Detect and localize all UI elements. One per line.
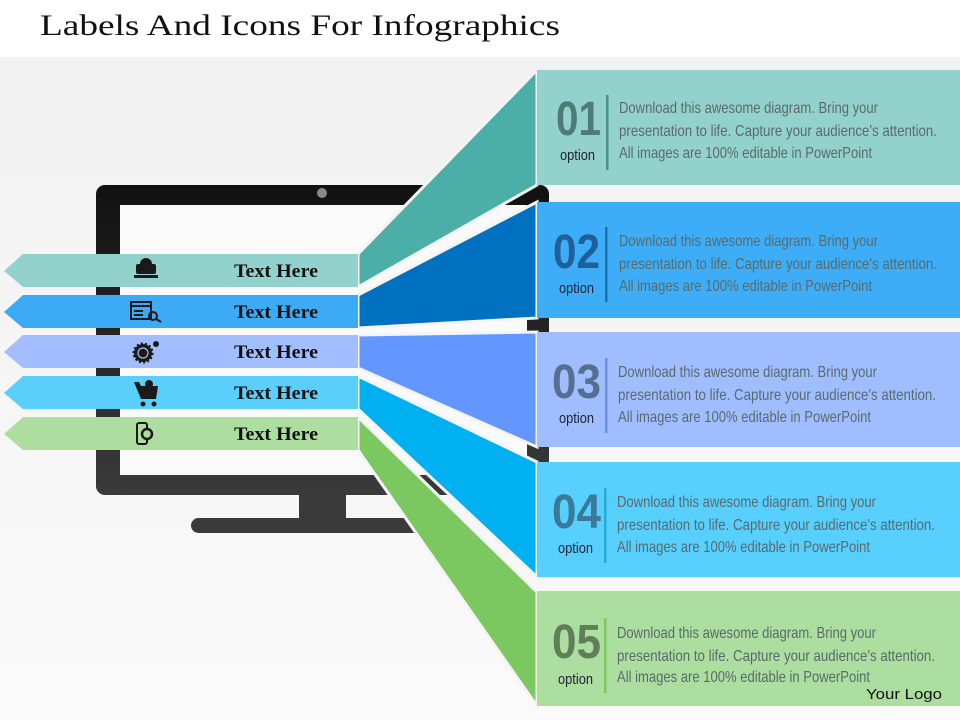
panel 1: Download this awesome diagram. Bring your [619, 100, 879, 117]
row 5: Text Here [234, 424, 318, 445]
icon: cart [134, 380, 158, 406]
connector 2 [358, 202, 537, 328]
panel 5 [537, 591, 960, 706]
panel 4: option [558, 540, 593, 557]
panel 4 [537, 462, 960, 577]
panel 3: option [559, 410, 594, 427]
panel 2: 02 [553, 226, 600, 279]
panel 5: All images are 100% editable in PowerPoint [617, 669, 870, 686]
panel 5: 05 [552, 616, 601, 669]
row 5 [4, 417, 358, 450]
panel 5: Download this awesome diagram. Bring your [617, 625, 877, 642]
panel 5: option [558, 671, 593, 688]
icon: cloud laptop [134, 258, 158, 278]
title: Labels And Icons For Infographics [40, 9, 560, 42]
panel 1: All images are 100% editable in PowerPoint [619, 145, 872, 162]
panel 1 [537, 70, 960, 185]
monitor [96, 185, 549, 533]
connector 4 [358, 376, 537, 577]
connector 3 [358, 332, 537, 447]
row 2 [4, 295, 358, 328]
row 1 [4, 254, 358, 287]
panel 2: All images are 100% editable in PowerPoint [619, 278, 872, 295]
panel 3: All images are 100% editable in PowerPoint [618, 409, 871, 426]
row 3: Text Here [234, 342, 318, 363]
icon: globe gears [134, 341, 159, 362]
logo text: Your Logo [866, 686, 942, 703]
row 4 [4, 376, 358, 409]
row 1: Text Here [234, 261, 318, 282]
panel 3: Download this awesome diagram. Bring your [618, 364, 878, 381]
panel 4: All images are 100% editable in PowerPoint [617, 539, 870, 556]
row 4: Text Here [234, 383, 318, 404]
row 3 [4, 335, 358, 368]
connector 1 [358, 70, 537, 287]
panel 4: 04 [552, 486, 601, 539]
panel 3: 03 [552, 356, 601, 409]
panel 4: Download this awesome diagram. Bring your [617, 494, 877, 511]
connector 5 [358, 417, 537, 706]
icon: phone gear [137, 423, 152, 444]
row 2: Text Here [234, 302, 318, 323]
icon: browser search [131, 302, 161, 322]
panel 2 [537, 202, 960, 318]
panel 1: 01 [556, 93, 601, 146]
panel 1: option [560, 147, 595, 164]
panel 2: option [559, 280, 594, 297]
panel 2: Download this awesome diagram. Bring your [619, 233, 879, 250]
panel 3 [537, 332, 960, 447]
